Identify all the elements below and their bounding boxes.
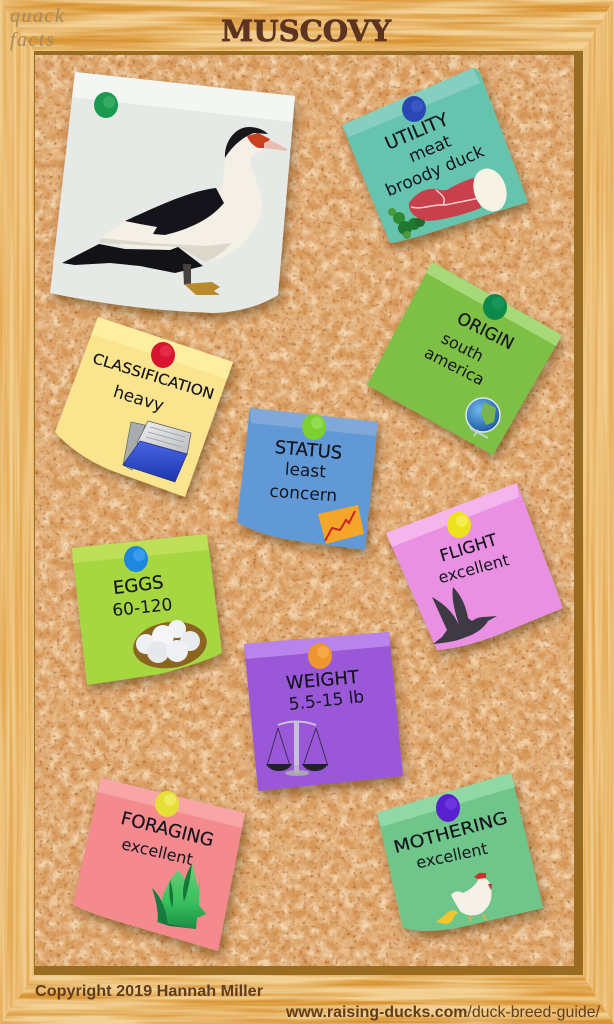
- pin: red: [151, 342, 175, 368]
- text: south america: south: [438, 328, 487, 366]
- icon: folder: [123, 421, 191, 482]
- title: MUSCOVY: [221, 14, 391, 48]
- heading: origin: ORIGIN: [453, 309, 517, 354]
- icon: flying duck: [432, 587, 497, 644]
- text: heavy: heavy: [111, 382, 166, 416]
- heading: utility: UTILITY: [382, 109, 453, 155]
- icon: balance scale: [266, 721, 328, 776]
- text: 60-120: 60-120: [111, 595, 173, 621]
- text: meat, broody duck: broody duck: [383, 142, 488, 201]
- pin: blue: [402, 96, 426, 122]
- pin: yellow: [155, 791, 179, 817]
- heading: flight: FLIGHT: [437, 530, 500, 565]
- note: weight: [244, 632, 403, 791]
- heading: weight: WEIGHT: [285, 667, 361, 694]
- text: south america: america: [421, 343, 488, 389]
- heading: classification: CLASSIFICATION: [91, 351, 216, 403]
- pin: orange: [308, 643, 332, 669]
- text: meat, broody duck: meat: [406, 131, 455, 167]
- pin: green: [94, 92, 118, 118]
- pin: dark green: [483, 294, 507, 320]
- text: least concern: least: [284, 460, 327, 482]
- icon: hen and chick: [436, 873, 492, 924]
- icon: meat and egg: [388, 164, 512, 239]
- heading: foraging: FORAGING: [119, 808, 216, 851]
- pin: blue: [124, 546, 148, 572]
- text: least concern: concern: [269, 482, 338, 506]
- heading: mothering: MOTHERING: [392, 808, 510, 858]
- text: excellent: excellent: [120, 834, 195, 869]
- note: duck illustration: [50, 72, 295, 313]
- icon: rising chart: [318, 505, 364, 544]
- pin: light green: [302, 414, 326, 440]
- note: flight: [386, 483, 563, 650]
- quack facts label: [10, 5, 65, 51]
- icon: muscovy duck: [62, 127, 287, 295]
- icon: globe: [466, 398, 500, 438]
- text: excellent: excellent: [436, 550, 511, 587]
- source url: www.raising-ducks.com/duck-breed-guide/: [285, 1004, 601, 1021]
- note: foraging: [73, 778, 245, 951]
- heading: status: STATUS: [274, 437, 343, 464]
- note: mothering: [377, 773, 543, 931]
- icon: egg nest: [130, 617, 210, 673]
- note: status: [237, 408, 378, 550]
- note: utility: [342, 68, 528, 243]
- heading: eggs: EGGS: [112, 572, 165, 599]
- icon: grass: [152, 863, 206, 929]
- copyright: Copyright 2019 Hannah Miller: [35, 983, 263, 1000]
- quack facts label: quack: [10, 5, 65, 27]
- note: classification: [55, 317, 233, 497]
- note: eggs: [72, 534, 222, 685]
- pin: yellow: [447, 512, 471, 538]
- quack facts label: facts: [10, 29, 55, 51]
- note: origin: [367, 262, 562, 455]
- pin: purple: [436, 794, 460, 822]
- text: excellent: excellent: [414, 839, 489, 872]
- text: least concern: [269, 460, 338, 506]
- text: 5.5-15 lb: 5.5-15 lb: [288, 687, 365, 715]
